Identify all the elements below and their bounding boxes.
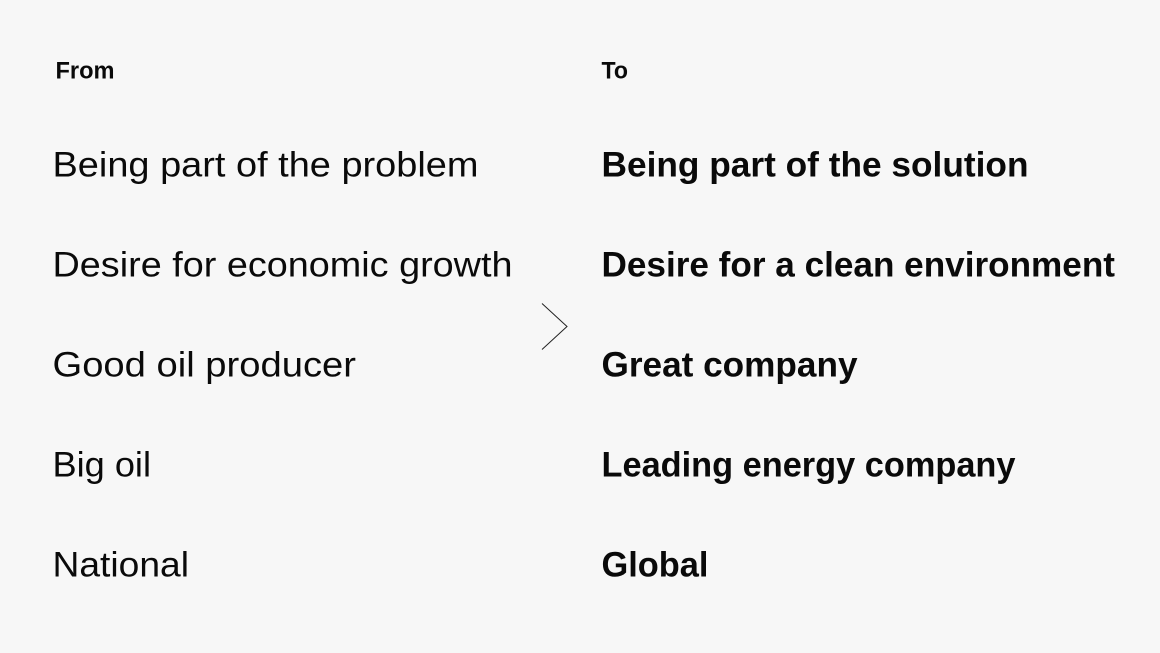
icon: chevron arrow	[542, 304, 567, 350]
text: good oil producer: Good oil producer	[52, 346, 356, 385]
text: leading energy company: Leading energy company	[602, 446, 1016, 485]
heading: From: From	[56, 58, 114, 84]
text: desire for economic growth: Desire for economic growth	[52, 246, 512, 285]
text: great company: Great company	[602, 346, 858, 385]
column: from	[52, 58, 512, 585]
text: being part of the problem: Being part of the problem	[52, 146, 478, 185]
text: desire for a clean environment: Desire for a clean environment	[602, 246, 1115, 285]
text: global: Global	[602, 546, 708, 585]
text: national: National	[52, 546, 189, 585]
text: being part of the solution: Being part of the solution	[602, 146, 1028, 185]
heading: To: To	[602, 58, 628, 84]
text: big oil: Big oil	[52, 446, 151, 485]
column: to	[602, 58, 1115, 585]
